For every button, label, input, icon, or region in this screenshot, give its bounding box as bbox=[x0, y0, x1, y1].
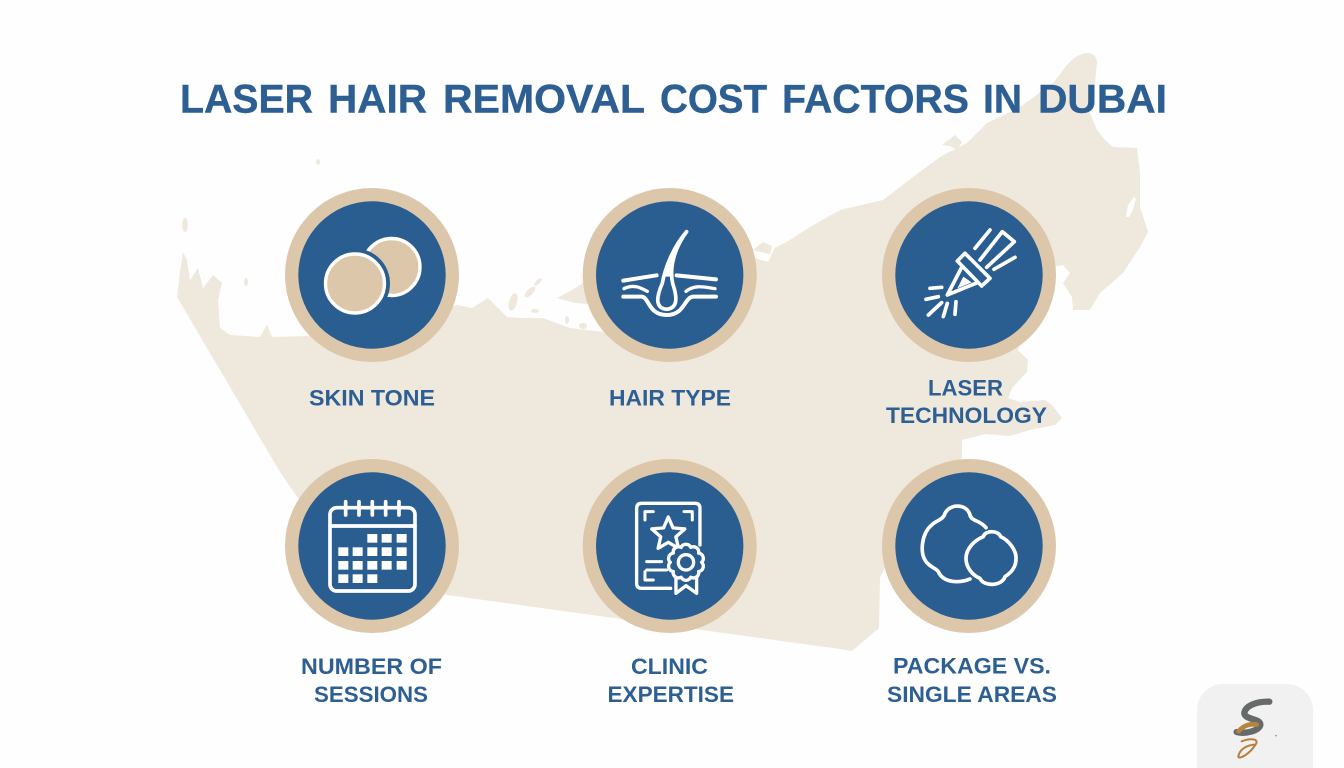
factor: clinic expertise bbox=[583, 459, 757, 707]
label: EXPERTISE bbox=[608, 682, 734, 707]
label: SESSIONS bbox=[314, 682, 428, 707]
title: REMOVAL bbox=[443, 78, 645, 122]
badge circle bbox=[882, 188, 1056, 362]
badge circle bbox=[285, 188, 459, 362]
icon: hair follicle bbox=[623, 232, 716, 315]
factor: hair type bbox=[583, 188, 757, 410]
icon: laser handpiece bbox=[926, 230, 1015, 317]
title bbox=[180, 78, 1167, 122]
icon: calendar bbox=[330, 502, 415, 591]
logo badge bbox=[1197, 684, 1313, 768]
title: LASER bbox=[180, 78, 313, 122]
icon: certificate with seal bbox=[637, 503, 703, 593]
title: IN bbox=[983, 78, 1022, 122]
title: COST bbox=[660, 78, 767, 122]
title: FACTORS bbox=[782, 78, 969, 122]
label: NUMBER OF bbox=[301, 654, 442, 679]
title: DUBAI bbox=[1038, 78, 1167, 122]
badge circle bbox=[285, 459, 459, 633]
factor: number of sessions bbox=[285, 459, 459, 707]
factor: package vs. single areas bbox=[882, 459, 1057, 707]
label: LASER bbox=[928, 376, 1003, 400]
label: HAIR TYPE bbox=[609, 386, 731, 410]
factor: laser technology bbox=[882, 188, 1056, 428]
badge circle bbox=[882, 459, 1056, 633]
icon: two skin tone swatches bbox=[320, 238, 420, 318]
lake in the map bbox=[1126, 197, 1136, 217]
label bbox=[608, 654, 734, 707]
icon: large and small treatment areas bbox=[922, 506, 1016, 584]
label bbox=[886, 376, 1047, 428]
label: CLINIC bbox=[631, 654, 708, 679]
label: SINGLE AREAS bbox=[887, 682, 1057, 707]
badge circle bbox=[583, 188, 757, 362]
background map of the UAE bbox=[177, 53, 1148, 651]
label: PACKAGE VS. bbox=[893, 654, 1051, 678]
badge circle bbox=[583, 459, 757, 633]
icon: brush script S logo bbox=[1237, 702, 1277, 758]
label: SKIN TONE bbox=[309, 386, 435, 410]
title: HAIR bbox=[328, 78, 427, 122]
label bbox=[301, 654, 442, 707]
factor: skin tone bbox=[285, 188, 459, 410]
label bbox=[887, 654, 1057, 707]
label: TECHNOLOGY bbox=[886, 403, 1047, 428]
